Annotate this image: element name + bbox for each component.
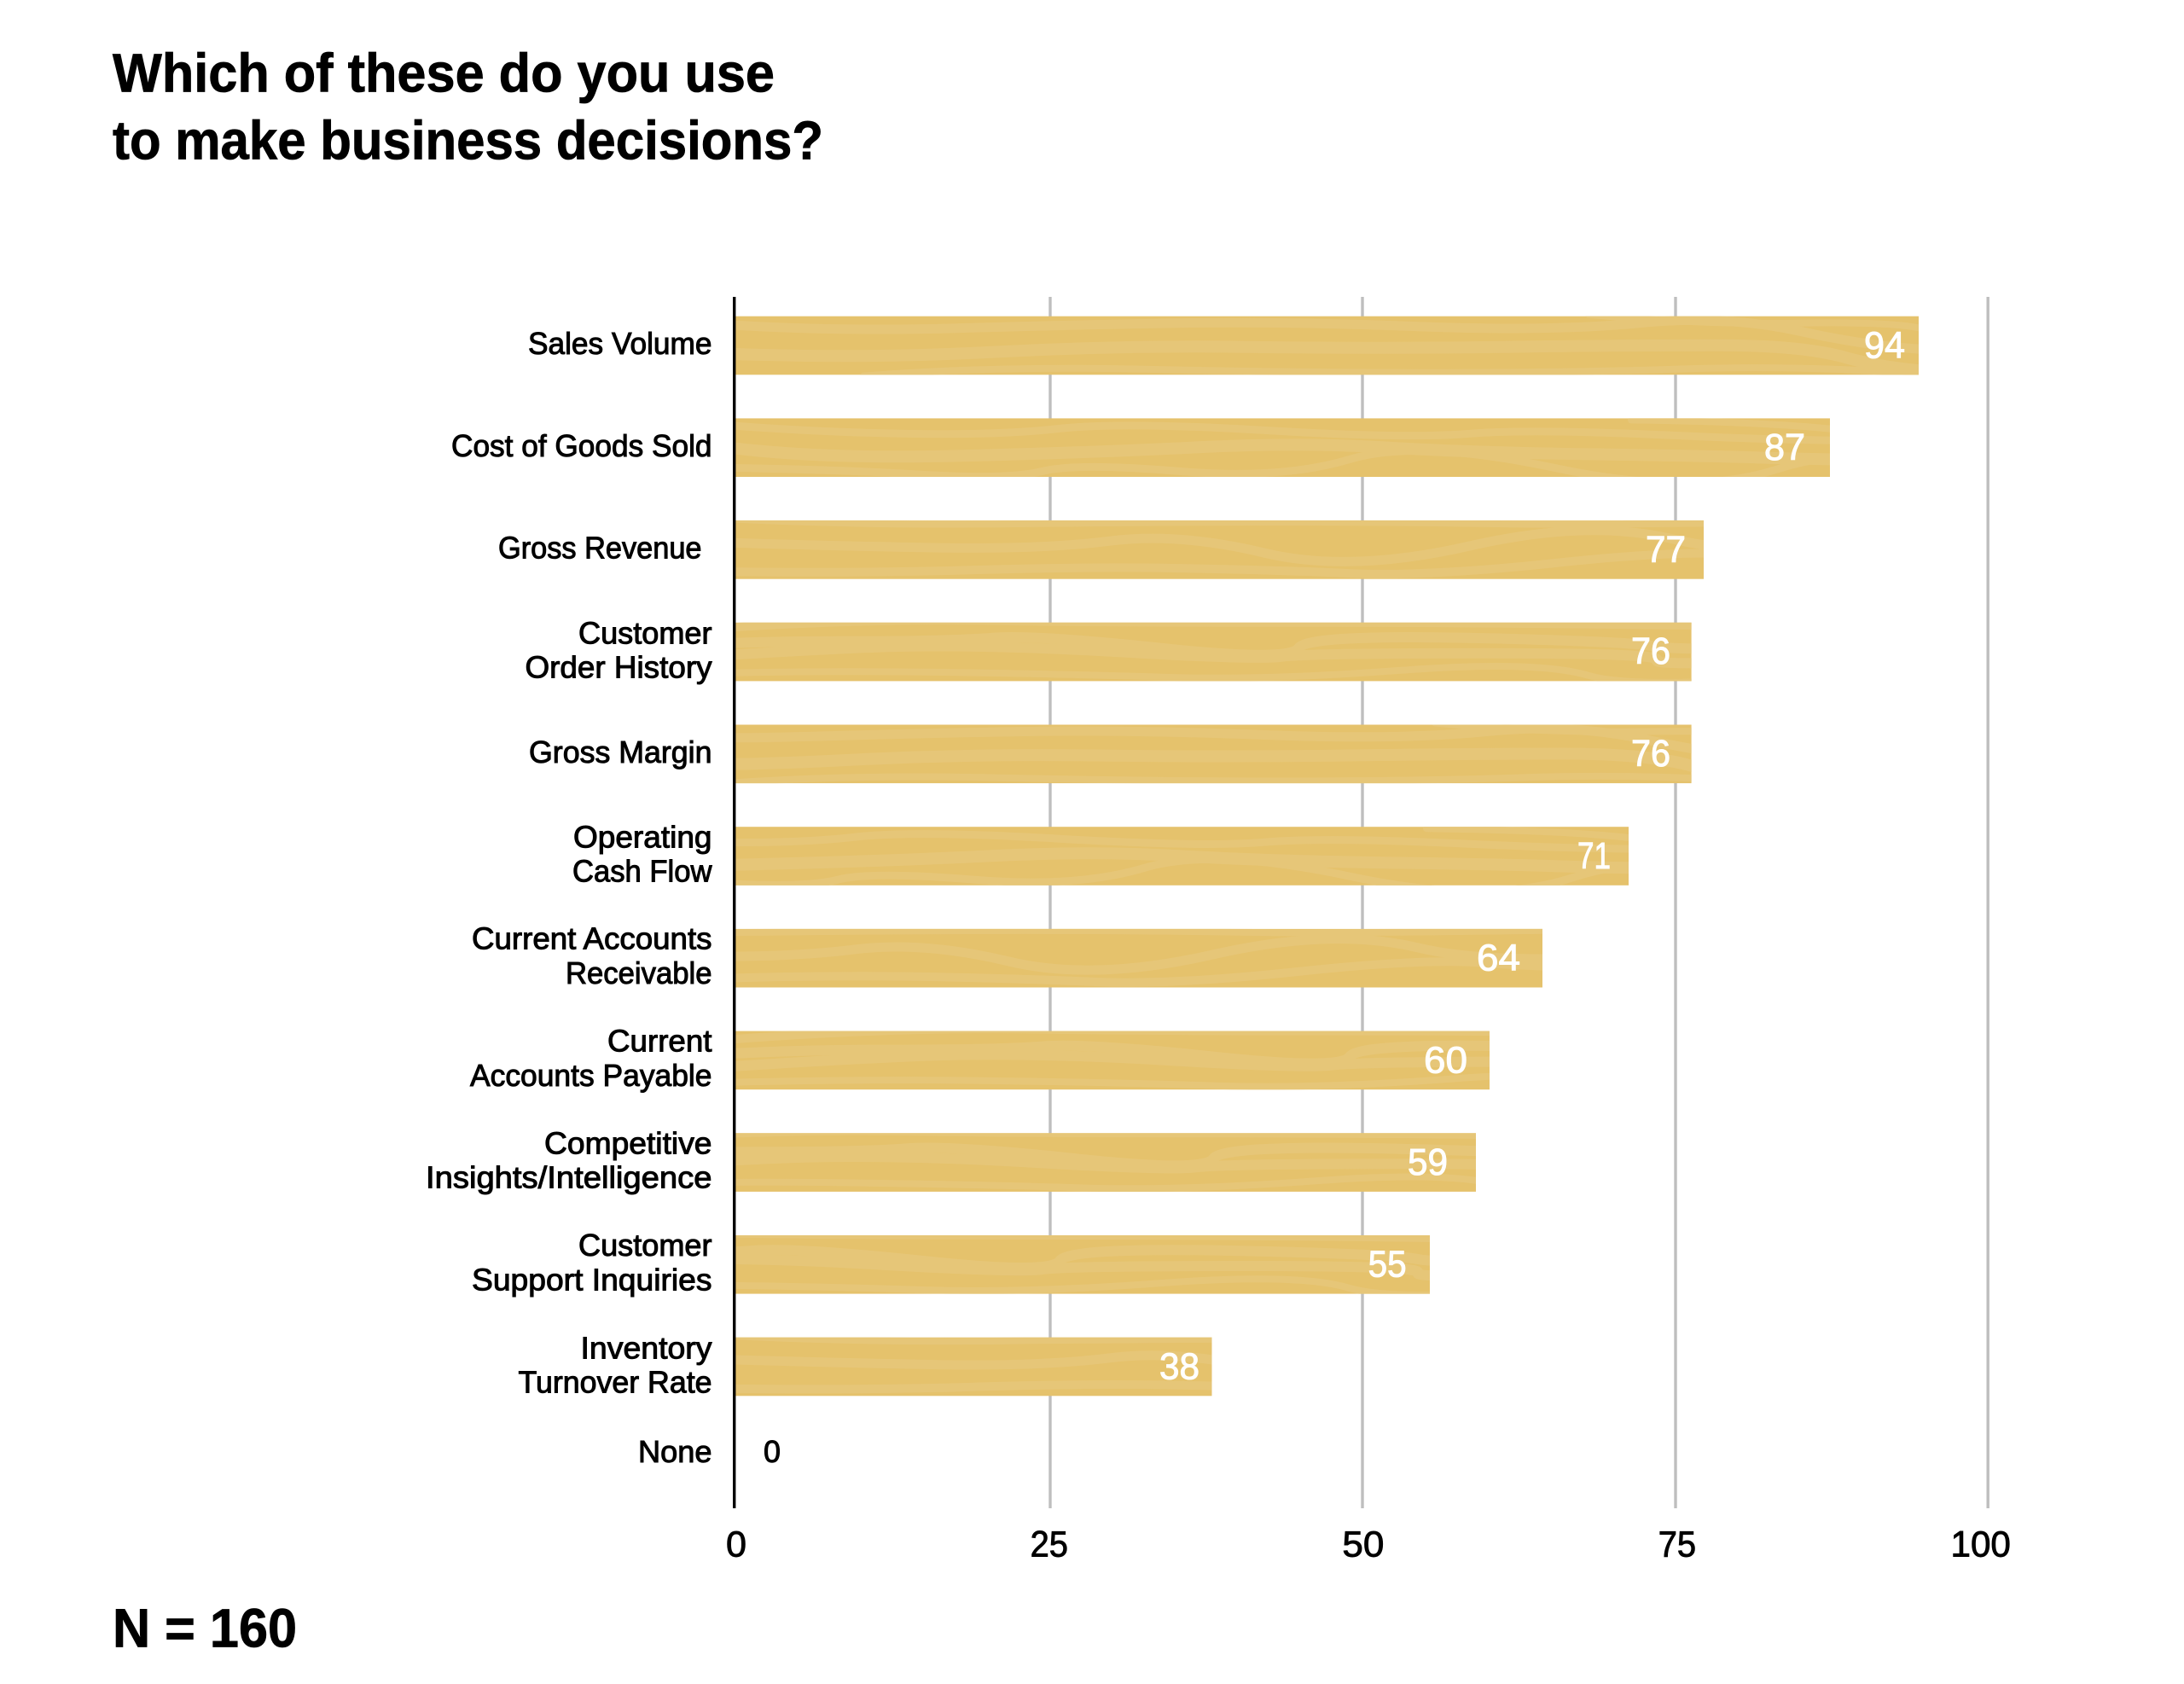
bar: Cost of Goods Sold 87 — [727, 418, 1947, 483]
title: to make business decisions? — [113, 109, 823, 171]
x axis labels: 75 — [1658, 1524, 1696, 1565]
bar: Competitive Insights/Intelligence 59: 59 — [1408, 1141, 1448, 1183]
bar: Customer Order History 76 — [624, 620, 1844, 682]
bar: Inventory Turnover Rate 38 — [727, 1336, 1947, 1396]
category labels: Turnover Rate — [519, 1365, 712, 1400]
bar: Competitive Insights/Intelligence 59 — [539, 1131, 1759, 1193]
bar: Customer Support Inquiries 55: 55 — [1368, 1244, 1407, 1286]
category labels: Sales Volume — [528, 326, 712, 361]
title — [113, 43, 823, 171]
category labels: Customer — [578, 1228, 712, 1263]
bar: Current Accounts Payable 60: 60 — [1424, 1039, 1467, 1081]
category labels: Support Inquiries — [472, 1263, 712, 1298]
category labels: Accounts Payable — [470, 1058, 712, 1093]
category labels: Gross Revenue — [498, 530, 701, 565]
category labels: Inventory — [580, 1331, 712, 1366]
category labels: Competitive — [544, 1126, 712, 1161]
category labels: Insights/Intelligence — [426, 1160, 712, 1195]
category labels: Current Accounts — [472, 921, 712, 956]
x axis labels — [726, 1524, 2011, 1565]
bar: Cost of Goods Sold 87: 87 — [1764, 427, 1805, 468]
value label: None 0: 0 — [764, 1434, 781, 1469]
bar: Current Accounts Payable 60 — [676, 1029, 1896, 1091]
bar: Inventory Turnover Rate 38: 38 — [1159, 1345, 1199, 1387]
bar: Gross Margin 76 — [573, 723, 1796, 787]
category labels: Receivable — [566, 955, 712, 990]
bar: Gross Margin 76: 76 — [1631, 733, 1670, 775]
bar: Customer Support Inquiries 55 — [386, 1234, 1606, 1295]
x axis labels: 50 — [1342, 1524, 1384, 1565]
vertical axis line — [733, 297, 735, 1508]
category labels: Operating — [573, 819, 712, 854]
category labels: None — [638, 1434, 712, 1469]
category labels: Order History — [526, 649, 712, 684]
category labels — [426, 326, 712, 1469]
bar chart — [386, 297, 2011, 1565]
x axis labels: 0 — [726, 1524, 746, 1565]
sample size note: N = 160 — [113, 1597, 297, 1658]
category labels: Cost of Goods Sold — [451, 428, 712, 463]
bar: Current Accounts Receivable 64 — [471, 927, 1691, 988]
bar: Current Accounts Receivable 64: 64 — [1477, 938, 1520, 979]
category labels: Cash Flow — [572, 853, 712, 888]
title: Which of these do you use — [113, 43, 775, 104]
bar: Operating Cash Flow 71: 71 — [1577, 835, 1611, 877]
category labels: Customer — [578, 615, 712, 650]
x axis labels: 100 — [1950, 1524, 2011, 1565]
x axis labels: 25 — [1031, 1524, 1068, 1565]
bar: Gross Revenue 77 — [727, 519, 1947, 579]
bar: Operating Cash Flow 71 — [522, 827, 1742, 891]
bar: Sales Volume 94: 94 — [1864, 325, 1905, 367]
category labels: Gross Margin — [529, 735, 712, 769]
bar: Customer Order History 76: 76 — [1631, 630, 1670, 672]
bar: Sales Volume 94 — [727, 315, 1949, 378]
category labels: Current — [607, 1024, 712, 1059]
gridlines — [1048, 297, 1989, 1508]
bar: Gross Revenue 77: 77 — [1646, 529, 1686, 571]
